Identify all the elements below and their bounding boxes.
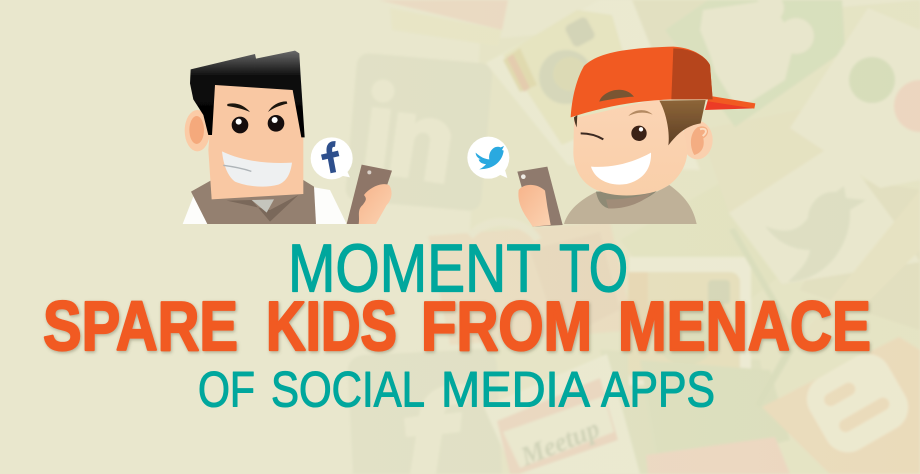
Twitter speech bubble <box>467 137 509 179</box>
smile <box>222 151 292 187</box>
green card <box>665 0 845 127</box>
shirt <box>183 187 347 224</box>
title line 3: APPS <box>601 362 715 418</box>
title line 2: FROM <box>421 287 592 365</box>
title line 3 <box>198 362 715 418</box>
hair <box>190 51 305 137</box>
phone <box>347 165 392 224</box>
pink card behind title <box>430 232 620 344</box>
collar <box>252 199 274 213</box>
ear <box>682 121 713 159</box>
slanted green edge <box>732 230 794 380</box>
hand <box>518 185 551 227</box>
title line 2: SPARE <box>43 287 238 365</box>
winking eye <box>581 133 603 139</box>
hand <box>359 184 392 224</box>
pink bottom card <box>646 437 790 474</box>
LinkedIn icon <box>378 57 478 208</box>
background collage of faded social media app icons <box>330 0 920 474</box>
Instagram card lower <box>628 257 751 385</box>
warm base patches <box>599 0 920 474</box>
title line 1: TO <box>559 230 628 306</box>
title <box>43 230 871 418</box>
title line 2 <box>43 287 871 365</box>
collar <box>596 191 657 208</box>
open eye <box>631 126 647 141</box>
ear <box>185 110 210 151</box>
card with dots <box>790 8 920 188</box>
title line 3: MEDIA <box>441 362 591 418</box>
Meetup card <box>484 354 640 474</box>
title line 3: OF <box>198 362 255 418</box>
boy character with Twitter bubble <box>467 47 755 227</box>
hair <box>659 100 706 145</box>
Facebook icon <box>441 352 498 472</box>
vest <box>191 180 316 224</box>
Instagram card top <box>486 0 700 170</box>
phone <box>517 167 563 227</box>
Facebook speech bubble <box>311 137 353 179</box>
Meetup label: Meetup <box>515 413 604 472</box>
title line 1: MOMENT <box>288 230 541 306</box>
fade veil over collage <box>330 0 920 474</box>
title line 2: MENACE <box>618 287 871 365</box>
face <box>573 98 687 195</box>
title line 2: KIDS <box>266 287 397 365</box>
title line 3: SOCIAL <box>271 362 425 418</box>
shirt <box>564 185 697 224</box>
top red card <box>389 0 507 40</box>
brim <box>705 96 755 110</box>
smile <box>591 153 651 185</box>
cap <box>571 47 713 117</box>
green strip <box>642 362 788 441</box>
eyes <box>232 115 284 133</box>
eyebrow <box>628 110 653 116</box>
Twitter card <box>729 143 920 284</box>
face <box>208 82 303 199</box>
eyebrows <box>227 103 250 112</box>
man character with Facebook bubble <box>183 51 392 224</box>
Blogger card <box>762 337 920 474</box>
